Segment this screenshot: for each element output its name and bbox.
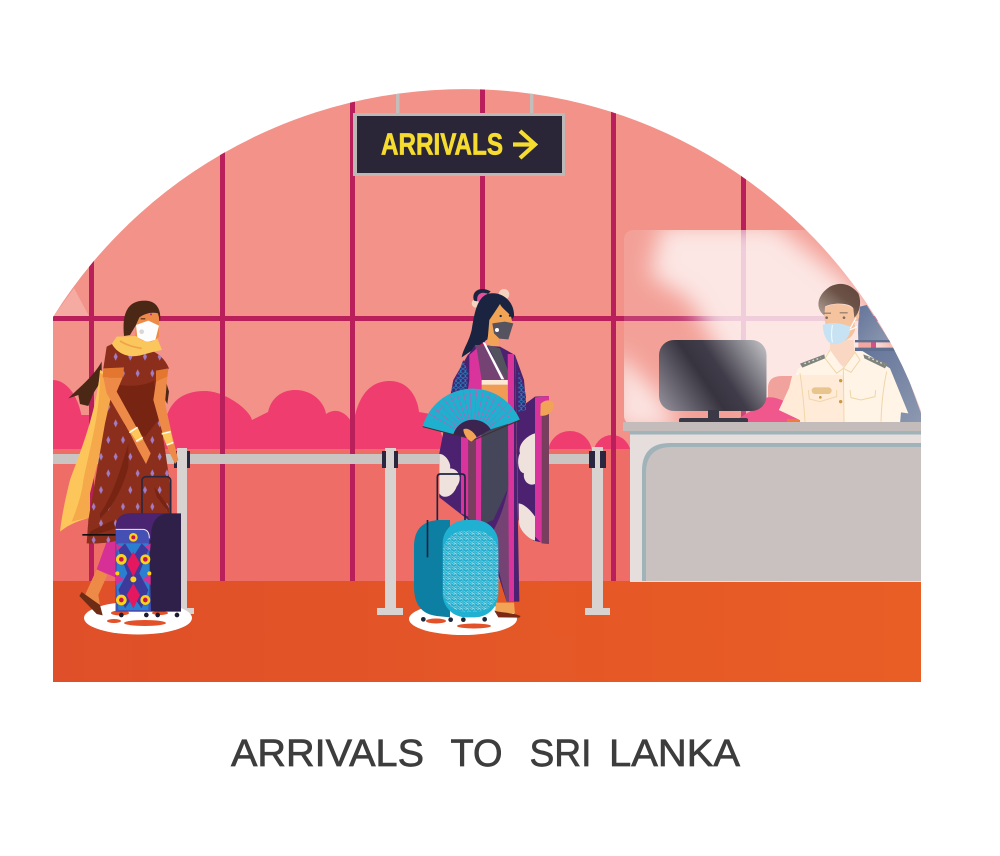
face mask [492, 322, 513, 339]
kimono robe [468, 345, 519, 602]
background shapes behind glass [735, 376, 801, 423]
neck and face [135, 313, 159, 345]
teal suitcase back [414, 520, 450, 617]
person: woman in red dress with dupatta [60, 301, 181, 617]
name badge [812, 387, 832, 394]
rail clamps [174, 451, 606, 468]
queue rail [53, 454, 590, 464]
chair [855, 305, 922, 423]
face [823, 304, 855, 342]
stanchion posts [177, 447, 610, 615]
floor [53, 581, 921, 682]
arrivals sign [353, 113, 565, 176]
officer at the desk [779, 284, 908, 423]
window frames [53, 85, 921, 581]
left sleeve [439, 354, 468, 520]
arrow [513, 131, 535, 158]
shirt details [800, 350, 887, 423]
desk body [630, 432, 925, 582]
right hand [540, 400, 554, 416]
lower wall [53, 449, 630, 581]
suitcase handle [437, 474, 465, 521]
title: SRI [530, 733, 592, 775]
bangles [129, 427, 173, 446]
person: woman in purple kimono with fan [414, 289, 554, 622]
suitcase wheels [421, 617, 487, 622]
folding fan [423, 389, 520, 439]
scarf [112, 336, 162, 356]
suitcase body [116, 513, 181, 612]
upper wall [53, 80, 921, 450]
epaulettes [800, 354, 888, 368]
title: ARRIVALS [231, 733, 424, 775]
suitcase wheels [119, 613, 179, 617]
teal suitcase front [443, 520, 498, 617]
foot and shoe [495, 603, 515, 613]
left sleeve blossom [439, 454, 460, 497]
suitcase handle [142, 477, 171, 520]
kimono pink stripes [461, 348, 482, 527]
obi sash [482, 384, 508, 403]
title: TO [450, 733, 502, 775]
computer monitor [659, 340, 766, 423]
hair [124, 301, 160, 336]
underskirt [481, 403, 509, 525]
trees outside the window [53, 380, 630, 449]
eyes [141, 318, 145, 319]
surgical mask [823, 323, 850, 344]
face mask [136, 321, 159, 342]
suitcase strap [82, 534, 117, 536]
scene: dome-shaped arrivals hall [23, 80, 940, 682]
dress [87, 343, 170, 543]
long hair [462, 293, 514, 357]
title: LANKA [609, 733, 741, 775]
face and neck [487, 304, 513, 349]
floor markers [84, 602, 517, 635]
sign label: ARRIVALS [381, 126, 503, 162]
booth glass screen [615, 225, 940, 430]
title [231, 733, 741, 775]
arms [103, 377, 151, 464]
dupatta [60, 370, 103, 532]
desk counter [623, 422, 925, 431]
long braid [68, 362, 169, 406]
right sleeve blossoms [518, 433, 535, 485]
hanging sign rods [396, 94, 534, 113]
desk inner panel [642, 443, 925, 581]
neck [830, 340, 855, 367]
buttons [819, 379, 842, 403]
shirt [779, 350, 908, 423]
right sleeve [515, 355, 549, 544]
hair bun and ornaments [472, 289, 509, 308]
hair [818, 284, 860, 318]
eyes and brows [824, 312, 848, 319]
legs and shoe [97, 542, 117, 577]
light corner facet [53, 288, 89, 317]
eyes [499, 314, 511, 317]
left hand on fan [463, 429, 477, 442]
infographic: arrivals hall illustration [53, 89, 921, 767]
suitcase floral print [115, 529, 151, 612]
